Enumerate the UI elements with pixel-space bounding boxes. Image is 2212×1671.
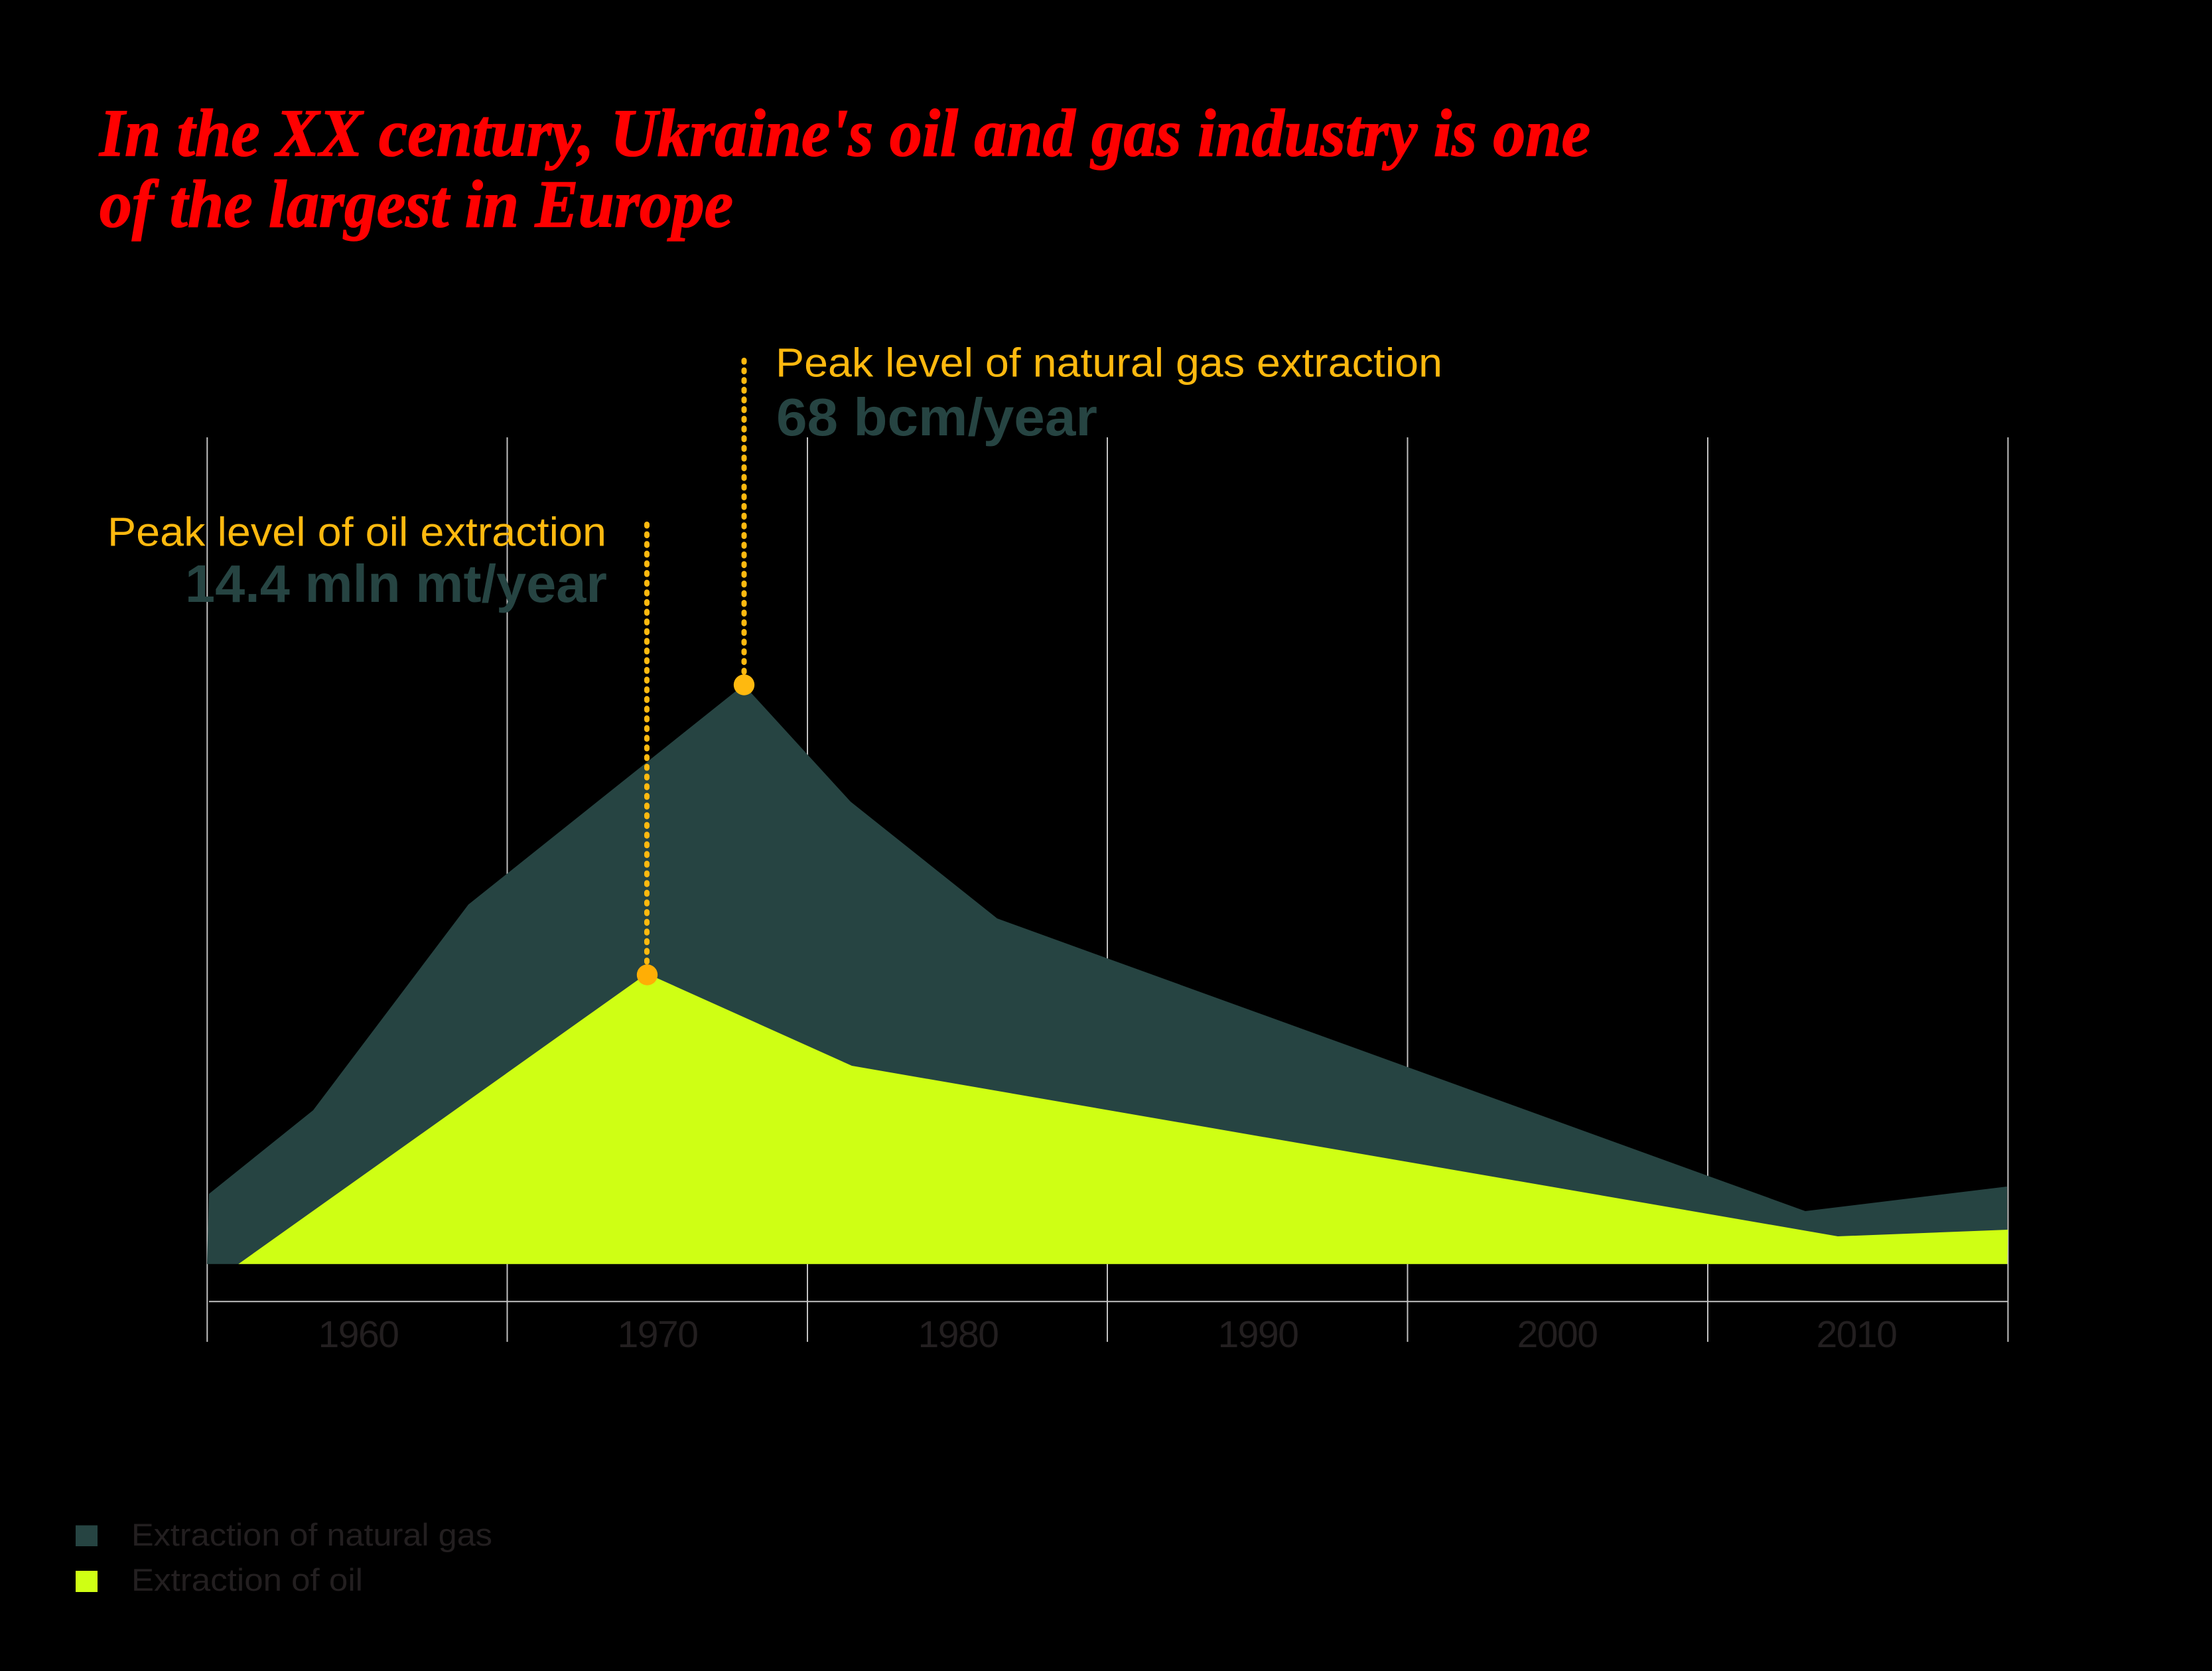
x axis year labels: 2000: [1517, 1313, 1597, 1356]
legend item: natural gas: Extraction of natural gas: [131, 1517, 492, 1552]
label: oil peak: Peak level of oil extraction: [107, 510, 606, 555]
x axis year labels: 1990: [1218, 1313, 1298, 1356]
marker: oil peak: [637, 964, 657, 985]
legend item: oil: Extraction of oil: [131, 1562, 363, 1597]
vertical grid lines and x axis: [207, 437, 2008, 1342]
x axis year labels: [318, 1313, 1896, 1356]
x axis year labels: 1980: [918, 1313, 998, 1356]
value: oil peak: 14.4 mln mt/year: [185, 554, 607, 613]
label: natural gas peak: Peak level of natural gas extraction: [776, 340, 1442, 385]
x axis year labels: 1970: [618, 1313, 697, 1356]
dotted leader: oil peak: [644, 524, 650, 966]
dotted leader: natural gas peak: [742, 360, 747, 677]
area: natural gas extraction: [207, 685, 2007, 1264]
legend: [76, 1517, 492, 1597]
x axis year labels: 2010: [1817, 1313, 1896, 1356]
title: [99, 96, 1590, 242]
title: In the XX century, Ukraine's oil and gas industry is one: [99, 96, 1590, 171]
value: natural gas peak: 68 bcm/year: [776, 388, 1097, 447]
x axis year labels: 1960: [318, 1313, 398, 1356]
callout: oil peak: [107, 510, 657, 985]
area: oil extraction: [238, 974, 2008, 1264]
title: of the largest in Europe: [100, 167, 733, 242]
callout: natural gas peak: [734, 340, 1442, 695]
marker: natural gas peak: [734, 674, 754, 695]
